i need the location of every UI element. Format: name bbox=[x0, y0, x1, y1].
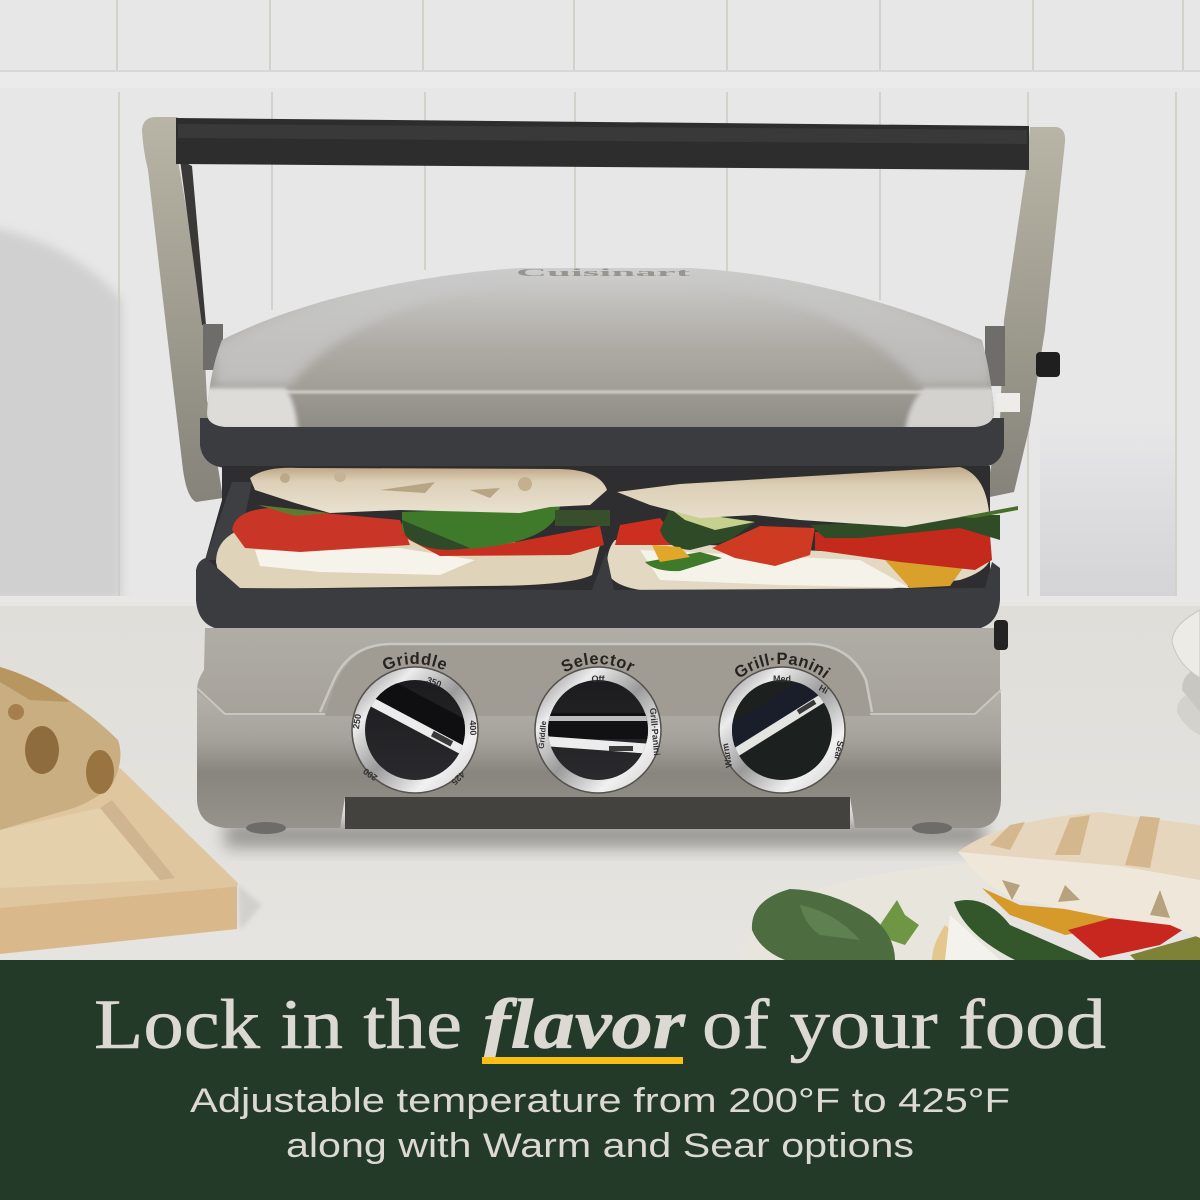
top handle bbox=[176, 118, 1029, 170]
dial: griddle: 400 bbox=[468, 720, 478, 736]
stacked plates bbox=[1172, 610, 1200, 735]
right sandwich bbox=[607, 467, 1018, 590]
dial: griddle: 200 bbox=[361, 766, 379, 783]
base housing bbox=[197, 628, 1000, 716]
dial: grill panini: Hi bbox=[817, 683, 830, 696]
hinge knobs bbox=[1036, 352, 1060, 377]
grill bbox=[142, 117, 1065, 834]
lower cast plate bbox=[196, 552, 1000, 630]
subheading bbox=[190, 1082, 1010, 1165]
dial: grill panini: Warm bbox=[720, 743, 734, 769]
warning label bbox=[996, 393, 1020, 412]
lid brand mark: Cuisinart bbox=[516, 267, 691, 279]
background: countertop bbox=[0, 606, 1200, 962]
dial: selector bbox=[534, 652, 662, 794]
bread loaf bbox=[0, 667, 120, 830]
dial: selector: Griddle bbox=[537, 720, 548, 749]
lid dome bbox=[205, 265, 995, 430]
subheading: along with Warm and Sear options bbox=[286, 1127, 914, 1165]
headline: Lock in the bbox=[94, 986, 462, 1064]
dial: grill panini: Med bbox=[773, 674, 791, 684]
dial: griddle: 250 bbox=[351, 713, 363, 730]
dial: grill panini: Sear bbox=[832, 740, 846, 761]
yellow underline bbox=[482, 1057, 683, 1064]
caption band bbox=[0, 960, 1200, 1200]
right support arm bbox=[985, 127, 1065, 498]
headline: flavor bbox=[483, 986, 687, 1064]
left support arm bbox=[142, 117, 223, 502]
dark interior behind sandwiches bbox=[205, 466, 990, 592]
dial: selector: Selector bbox=[562, 652, 635, 672]
control panel recess bbox=[325, 644, 872, 716]
feet bbox=[246, 822, 286, 834]
dial: selector: Grill·Panini bbox=[648, 707, 662, 756]
dial: griddle: Griddle bbox=[383, 652, 446, 670]
cutting board with bread bbox=[0, 667, 238, 954]
headline: of your food bbox=[702, 986, 1106, 1064]
dial: griddle: 350 bbox=[425, 675, 443, 689]
dial: selector: Off bbox=[592, 674, 605, 684]
plate in foreground bbox=[738, 862, 1000, 960]
spinach leaf bbox=[752, 889, 919, 960]
background: tiled wall bbox=[0, 0, 1200, 610]
dial: griddle bbox=[351, 652, 479, 794]
foreground sandwich bbox=[932, 812, 1200, 960]
left sandwich bbox=[216, 468, 610, 589]
subheading: Adjustable temperature from 200°F to 425°F bbox=[190, 1082, 1010, 1120]
dial: grill panini bbox=[718, 652, 846, 794]
dial: grill panini: Grill·Panini bbox=[735, 652, 831, 678]
upper cast plate bbox=[200, 418, 1004, 468]
dial: griddle: 425 bbox=[449, 769, 467, 787]
dark gap under housing bbox=[345, 797, 850, 829]
side button bbox=[994, 620, 1008, 650]
grill shadow on counter bbox=[225, 822, 985, 930]
